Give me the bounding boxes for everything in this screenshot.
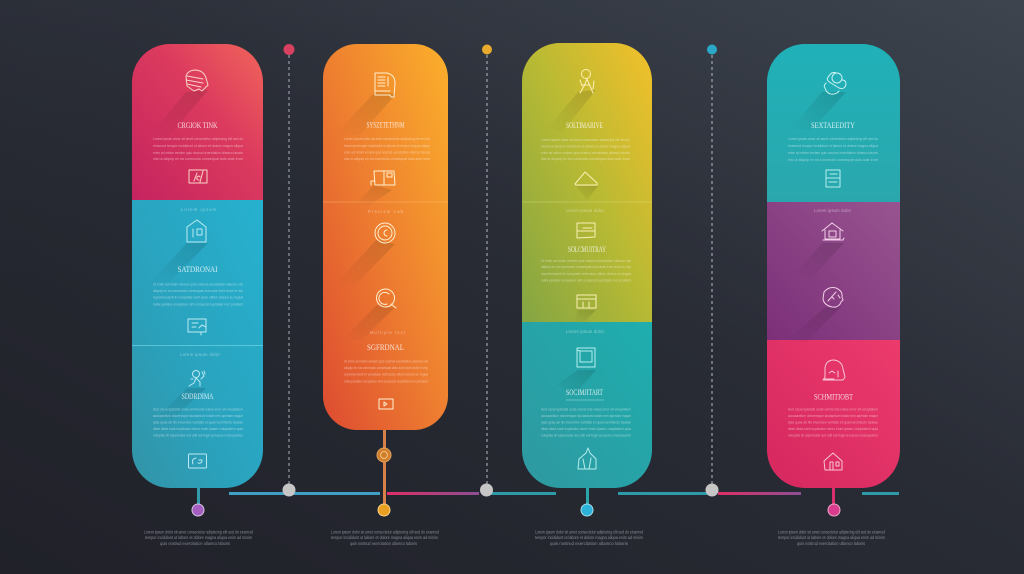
text block: section 1: nisi ut aliquip ex ea commodo consequat duis aute irure — [344, 156, 430, 161]
caption: column 3: tempor incididunt ut labore et dolore magna aliqua enim ad minim — [535, 535, 643, 540]
connector: column 2 — [377, 430, 391, 516]
text block: section 1: nisi ut aliquip ex ea commodo consequat duis aute irure — [153, 156, 243, 161]
heading: section 2: SOLCMUITRAY — [568, 244, 606, 254]
small label: Lorem ipsum — [181, 207, 216, 212]
icon: bag — [578, 448, 596, 469]
dashed marker 2 — [480, 44, 493, 496]
text block: section 1: eiusmod tempor incididunt ut labore et dolore magna aliqua — [788, 143, 879, 148]
text block: section 1: Lorem ipsum dolor sit amet consectetur adipiscing elit sed do — [541, 137, 630, 142]
text block: section 1: nisi ut aliquip ex ea commodo consequat duis aute irure — [541, 156, 630, 161]
text block: section 1: Lorem ipsum dolor sit amet consectetur adipiscing elit sed do — [344, 136, 430, 141]
caption: column 1: quis nostrud exercitation ullamco laboris — [160, 541, 230, 546]
text block: section 3 — [541, 406, 632, 438]
text block: section 1: eiusmod tempor incididunt ut labore et dolore magna aliqua — [153, 143, 244, 148]
caption: column 3: Lorem ipsum dolor sit amet consectetur adipiscing elit sed do eiusmod — [535, 530, 644, 534]
text block: section 1: Lorem ipsum dolor sit amet consectetur adipiscing elit sed do — [788, 136, 878, 141]
heading: section 1: CRGIOK TINK — [178, 120, 218, 130]
panel: column 2 — [323, 44, 448, 430]
icon: layered shell — [186, 70, 208, 91]
text block: section 3: accusantium doloremque laudantium totam rem aperiam eaque — [541, 413, 631, 418]
dashed marker 1 — [282, 44, 296, 496]
text block: section 2: nulla pariatur excepteur sint occaecat cupidatat non proident — [541, 278, 632, 282]
small label: Multiple text — [370, 330, 406, 335]
heading: section 3: SOCIMJITART — [566, 387, 604, 397]
text block: section 2: nulla pariatur excepteur sint occaecat cupidatat non proident — [153, 302, 244, 306]
dashed marker 3 — [706, 44, 718, 496]
connector: column 3 — [581, 488, 593, 516]
heading: section 3: SDDRDIMA — [182, 391, 214, 401]
text block: section 2: voluptas sit aspernatur aut odit aut fugit sed quia consequuntur — [788, 432, 879, 438]
icon: framed notebook — [577, 348, 595, 367]
text block: section 1: nisi ut aliquip ex ea commodo consequat duis aute irure — [788, 157, 878, 162]
icon: list card — [826, 170, 840, 187]
text block: section 1: enim ad minim veniam quis nostrud exercitation ullamco laboris — [344, 150, 430, 154]
text block: section 1: eiusmod tempor incididunt ut labore et dolore magna aliqua — [344, 143, 431, 148]
icon: framed sketch — [189, 170, 207, 183]
text block: section 1: Lorem ipsum dolor sit amet consectetur adipiscing elit sed do — [153, 136, 243, 141]
text block: section 1 — [788, 136, 879, 162]
small label: Lorem ipsum dolor — [814, 208, 852, 213]
caption: column 4 — [778, 530, 886, 546]
icon: ring with handle — [376, 289, 396, 308]
panel: column 3 — [522, 43, 652, 488]
text block: section 1 — [541, 137, 631, 161]
text block: section 2: reprehenderit in voluptate velit esse cillum dolore eu fugiat — [153, 294, 244, 300]
text block: section 3: Sed ut perspiciatis unde omnis iste natus error sit voluptatem — [541, 406, 631, 412]
icon: tent — [575, 172, 597, 185]
text block: section 2: aliquip ex ea commodo consequat duis aute irure dolor in rep — [153, 288, 243, 293]
icon: open book — [577, 223, 595, 238]
text block: section 2: reprehenderit in voluptate velit esse cillum dolore eu fugiat — [541, 271, 632, 276]
icon: person — [189, 370, 205, 386]
text block: section 2: aliquip ex ea commodo consequat duis aute irure dolor in rep — [344, 365, 428, 370]
text block: section 2: Ut enim ad minim veniam quis nostrud exercitation ullamco nisi — [541, 258, 631, 263]
small label: Lorem ipsum dolor — [180, 352, 221, 357]
text block: section 2: nulla pariatur excepteur sint occaecat cupidatat non proident — [344, 378, 429, 384]
icon: tray box — [577, 295, 596, 308]
icon: cart frame — [371, 171, 395, 185]
caption: column 1: tempor incididunt ut labore et dolore magna aliqua enim ad minim — [145, 535, 252, 540]
text block: section 1: enim ad minim veniam quis nostrud exercitation ullamco laboris — [153, 150, 243, 155]
icon: house — [187, 220, 206, 242]
icon: small house — [822, 223, 844, 240]
caption: column 1: Lorem ipsum dolor sit amet consectetur adipiscing elit sed do eiusmod — [144, 530, 254, 534]
caption: column 2: quis nostrud exercitation ullamco laboris — [350, 541, 417, 546]
text block: section 2 — [344, 358, 429, 384]
small label: Lorem ipsum dolor — [566, 329, 605, 334]
caption: column 4: quis nostrud exercitation ullamco laboris — [797, 541, 865, 546]
icon: target circle — [375, 223, 395, 243]
icon: wave frame — [188, 454, 206, 468]
heading: section 1: SOLTIMARIVE — [566, 120, 603, 130]
text block: section 3: vitae dicta sunt explicabo nemo enim ipsam voluptatem quia — [153, 426, 244, 431]
caption: column 1 — [144, 530, 254, 546]
text block: section 2 — [788, 406, 879, 438]
decorative underline — [566, 400, 604, 401]
icon: dome person — [823, 360, 845, 380]
text block: section 2: reprehenderit in voluptate velit esse cillum dolore eu fugiat — [344, 372, 429, 376]
caption: column 3 — [535, 530, 644, 546]
text block: section 2: aliquip ex ea commodo consequat duis aute irure dolor in rep — [541, 264, 631, 269]
caption: column 4: Lorem ipsum dolor sit amet consectetur adipiscing elit sed do eiusmod — [778, 530, 886, 534]
text block: section 1: eiusmod tempor incididunt ut labore et dolore magna aliqua — [541, 144, 631, 148]
connector: column 4 — [828, 488, 840, 516]
text block: section 3: accusantium doloremque laudantium totam rem aperiam eaque — [153, 413, 243, 418]
text block: section 2: vitae dicta sunt explicabo nemo enim ipsam voluptatem quia — [788, 426, 879, 431]
text block: section 3: vitae dicta sunt explicabo nemo enim ipsam voluptatem quia — [541, 426, 632, 431]
icon shadows column 1 — [165, 90, 208, 412]
icon: round face — [823, 288, 843, 307]
panel: column 4 — [767, 44, 900, 488]
caption: column 2 — [331, 530, 440, 546]
text block: section 1 — [344, 136, 431, 161]
caption: column 2: Lorem ipsum dolor sit amet consectetur adipiscing elit sed do eiusmod — [331, 530, 440, 534]
heading: section 2: SATDRONAI — [178, 264, 218, 274]
text block: section 2 — [153, 282, 244, 306]
text block: section 1: enim ad minim veniam quis nostrud exercitation ullamco laboris — [788, 150, 878, 155]
icon shadows column 2 — [348, 92, 396, 336]
heading: section 2: SGFRDNAL — [367, 342, 404, 352]
text block: section 2: accusantium doloremque laudantium totam rem aperiam eaque — [788, 413, 878, 418]
icon: cloud knot — [824, 72, 846, 94]
text block: section 3: ipsa quae ab illo inventore veritatis et quasi architecto beatae — [541, 420, 631, 424]
text block: section 2: Sed ut perspiciatis unde omnis iste natus error sit voluptatem — [788, 406, 878, 412]
text block: section 3 — [153, 406, 244, 438]
small label: Preview Lab — [368, 209, 404, 214]
text block: section 3: voluptas sit aspernatur aut odit aut fugit sed quia consequuntur — [153, 432, 244, 438]
text block: section 1 — [153, 136, 244, 161]
text block: section 2 — [541, 258, 632, 282]
icon shadows column 4 — [786, 92, 846, 342]
panel: column 1 — [132, 44, 263, 488]
caption: column 2: tempor incididunt ut labore et dolore magna aliqua enim ad minim — [331, 535, 438, 540]
text block: section 3: Sed ut perspiciatis unde omnis iste natus error sit voluptatem — [153, 406, 243, 412]
icon: play frame — [379, 399, 393, 409]
heading: section 2: SCHMITIOBT — [814, 392, 854, 402]
text block: section 2: Ut enim ad minim veniam quis nostrud exercitation ullamco nisi — [153, 282, 243, 286]
connector: column 1 — [192, 488, 204, 516]
icon: gabled house — [824, 453, 842, 470]
text block: section 3: ipsa quae ab illo inventore veritatis et quasi architecto beatae — [153, 420, 243, 424]
icon: document — [375, 73, 395, 97]
icon: figure — [580, 70, 594, 93]
timeline axis — [229, 492, 899, 495]
icon shadows column 3 — [561, 90, 598, 390]
caption: column 3: quis nostrud exercitation ullamco laboris — [550, 541, 628, 546]
text block: section 1: enim ad minim veniam quis nostrud exercitation ullamco laboris — [541, 150, 630, 155]
heading: section 1: SEXTAEEDITY — [811, 120, 855, 130]
icon: chart board — [188, 319, 206, 335]
text block: section 2: ipsa quae ab illo inventore veritatis et quasi architecto beatae — [788, 420, 878, 424]
heading: section 1: SYSZETETHNM — [366, 120, 405, 130]
caption: column 4: tempor incididunt ut labore et dolore magna aliqua enim ad minim — [778, 535, 885, 540]
small label: Lorem ipsum dolor — [566, 208, 605, 213]
text block: section 2: Ut enim ad minim veniam quis nostrud exercitation ullamco nisi — [344, 358, 428, 364]
text block: section 3: voluptas sit aspernatur aut odit aut fugit sed quia consequuntur — [541, 432, 632, 438]
